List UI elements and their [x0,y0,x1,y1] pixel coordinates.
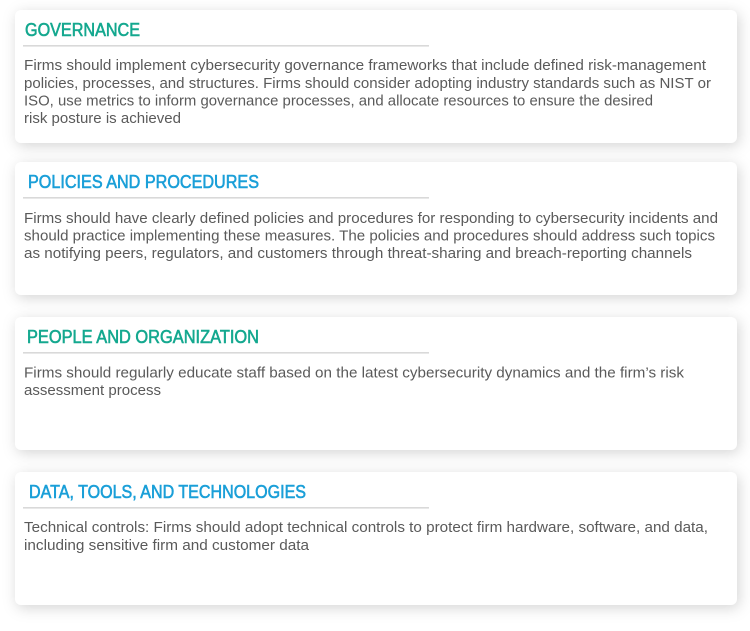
heading: data, tools, and technologies: DATA, TOOLS, AND TECHNOLOGIES [29,482,306,502]
text block: governance: ISO, use metrics to inform governance processes, and allocate resources to ensure the desired [24,94,653,110]
text block: policies and procedures: should practice implementing these measures. The policies and procedures should address such topics [24,228,715,244]
text block: governance: policies, processes, and structures. Firms should consider adopting industry standards such as NIST or [24,76,711,92]
text block: governance: Firms should implement cybersecurity governance frameworks that include defined risk-management [24,58,706,74]
panel: data, tools, and technologies [15,472,737,605]
text block: people and organization: Firms should regularly educate staff based on the latest cybersecurity dynamics and the firm’s risk [24,366,685,382]
text block: data, tools, and technologies: including sensitive firm and customer data [24,538,310,554]
text block: policies and procedures: as notifying peers, regulators, and customers through threat-sharing and breach-reporting channels [24,246,692,262]
text block: governance [24,58,711,127]
panel: people and organization [15,317,737,450]
text block: governance: risk posture is achieved [24,111,181,127]
text block: data, tools, and technologies: Technical controls: Firms should adopt technical controls to protect firm hardware, software, and data, [24,520,708,536]
text block: policies and procedures: Firms should have clearly defined policies and procedures for responding to cybersecurity incidents and [24,211,718,227]
heading: people and organization: PEOPLE AND ORGANIZATION [27,327,259,347]
text block: policies and procedures [24,211,718,262]
panel: governance [15,10,737,143]
text block: people and organization: assessment process [24,383,161,399]
text block: data, tools, and technologies [24,520,708,554]
text block: people and organization [24,366,685,399]
heading: policies and procedures: POLICIES AND PROCEDURES [28,172,259,192]
heading: governance: GOVERNANCE [25,20,140,40]
panel: policies and procedures [15,162,737,295]
